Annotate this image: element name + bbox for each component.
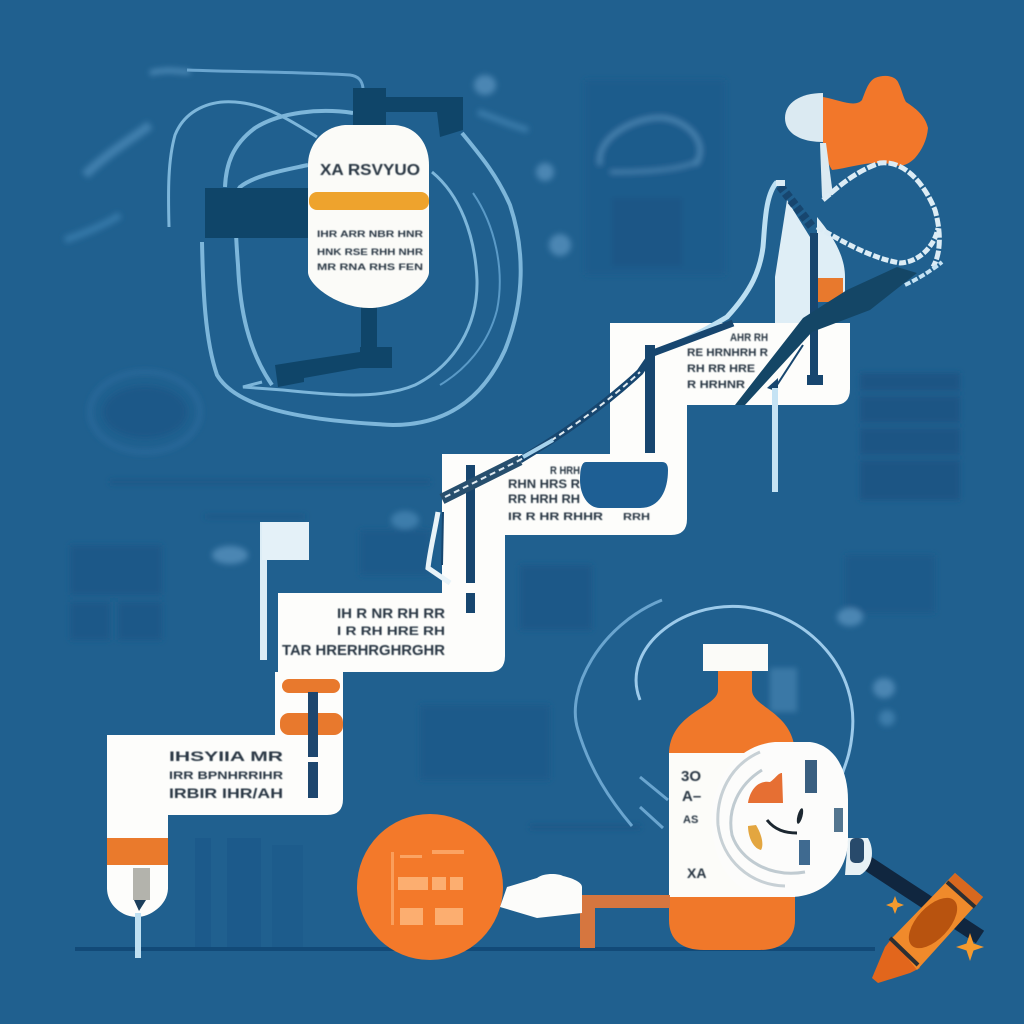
panel: staircase (107, 323, 850, 838)
white body column (775, 200, 810, 323)
step 3 text: RHN HRS R (508, 477, 580, 491)
lens contents (748, 773, 783, 803)
stem (820, 143, 833, 197)
dropper at lower left (107, 838, 168, 958)
bag text (317, 162, 424, 272)
thin arrow (775, 345, 803, 388)
connector (845, 838, 872, 875)
step 4 text: RE HRNHRH R (687, 347, 768, 359)
dark vertical (810, 233, 818, 383)
step 3 text: IR R HR RHHR (508, 511, 603, 523)
arm and hand (500, 874, 582, 918)
sparkle small (886, 896, 904, 914)
bottle label (669, 753, 795, 897)
bag text: HNK RSE RHH NHR (317, 247, 424, 257)
step 3 text: R HRH (550, 465, 580, 477)
step 4 text (687, 332, 768, 391)
step 1 text: IRR BPNHRRIHR (169, 770, 283, 782)
step 1 text: IHSYIIA MR (169, 748, 283, 764)
panel: bottle with magnifier (575, 600, 980, 950)
step 2 text: I R RH HRE RH (337, 624, 445, 638)
step 4 text: AHR RH (730, 332, 768, 344)
dark thick band (735, 267, 917, 405)
panel: IV bag with tubes (169, 70, 521, 425)
panel: top-right figure with orange hand (735, 76, 942, 492)
step 4 text: RH RR HRE (687, 363, 755, 375)
flag marker (260, 522, 309, 660)
step 3 text (508, 465, 650, 523)
dark pill on step 3 (580, 462, 668, 508)
step 3 text: RRH (623, 512, 650, 523)
icon: crayon logo (872, 873, 984, 983)
label text: A– (682, 788, 701, 805)
label text: AS (683, 814, 698, 826)
faint background shapes (65, 70, 960, 829)
step 2 text: IH R NR RH RR (337, 605, 445, 621)
step 1 text: IRBIR IHR/AH (169, 785, 283, 801)
valve on step 1-2 (280, 679, 343, 798)
head (785, 93, 823, 142)
handle (867, 863, 980, 937)
bottle body (669, 671, 795, 950)
label text (681, 768, 706, 881)
vertical bar on step 4 (645, 345, 655, 453)
step 2 text: TAR HRERHRGHRGHR (282, 642, 445, 659)
bottle cap (703, 644, 768, 671)
staircase white path (107, 323, 850, 838)
chart bars in circle (391, 850, 464, 925)
circular rings (575, 600, 853, 828)
step 2 text (282, 605, 445, 659)
bag text: XA RSVYUO (320, 162, 420, 179)
orange band (309, 192, 429, 210)
sparkle large (956, 933, 984, 961)
ground line (75, 947, 875, 951)
label text: 3O (681, 768, 701, 785)
panel: pipe columns at base (195, 838, 303, 947)
step 3 text: RR HRH RH (508, 492, 580, 506)
tubes around bag (169, 70, 521, 425)
lens rings (718, 752, 785, 886)
lens body (712, 742, 848, 897)
dark connectors (205, 88, 463, 387)
vertical bar step 2-3 (466, 465, 475, 613)
rope from step 3 to figure (428, 182, 777, 583)
connector bar (580, 895, 670, 948)
bag body (308, 125, 429, 308)
bag text: MR RNA RHS FEN (317, 262, 423, 272)
rope loop (823, 163, 939, 267)
orange hand (823, 76, 928, 170)
magnifier (712, 742, 980, 937)
bag text: IHR ARR NBR HNR (317, 229, 424, 239)
panel: orange circle with pointing arm (357, 814, 670, 960)
step 4 text: R HRHNR (687, 379, 745, 391)
circle (357, 814, 503, 960)
hanging line (772, 388, 778, 492)
dark rope knot (780, 186, 813, 228)
label text: XA (687, 865, 706, 881)
step 1 text (169, 748, 283, 801)
